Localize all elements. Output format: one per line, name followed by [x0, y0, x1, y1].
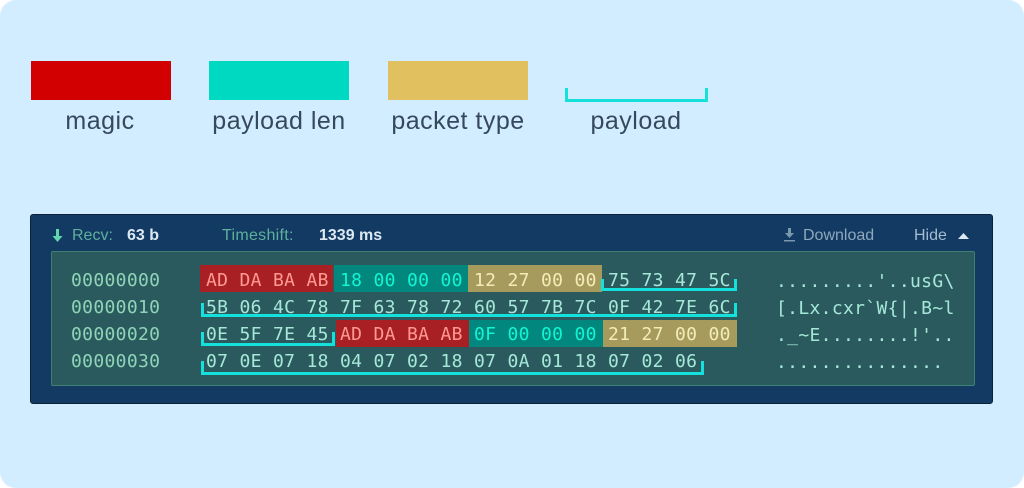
bytes: payload len: 0F 00 00 00 [474, 324, 597, 345]
button: Download: Download [803, 227, 874, 244]
offset: 00000020 [71, 324, 160, 345]
bytes: payload: 5B 06 4C 78 7F 63 78 72 60 57 7B 7C 0F 42 7E 6C [206, 297, 731, 318]
legend swatch: packet type [388, 61, 528, 100]
legend swatch: magic [31, 61, 171, 100]
highlight: payload len [469, 320, 603, 347]
bytes: payload: 07 0E 07 18 04 07 02 18 07 0A 01 18 07 02 06 [206, 351, 697, 372]
highlight: packet type [468, 265, 602, 292]
offset: 00000010 [71, 297, 160, 318]
bytes: packet type: 21 27 00 00 [608, 324, 731, 345]
ascii: ._~E........!'.. [776, 325, 955, 346]
hex row 2 [71, 320, 955, 347]
legend swatch: payload len [209, 61, 349, 100]
bytes: payload len: 18 00 00 00 [340, 270, 463, 291]
ascii: .........'..usG\ [776, 271, 955, 292]
payload bracket row 3 [201, 361, 704, 375]
label: Recv: Recv: [72, 227, 113, 244]
legend label: payload: payload [590, 107, 682, 135]
offset: 00000030 [71, 351, 160, 372]
offset: 00000000 [71, 270, 160, 291]
bytes: payload: 0E 5F 7E 45 [206, 324, 329, 345]
highlight: magic [200, 265, 333, 292]
legend label: magic: magic [65, 107, 135, 135]
icon: caret up [958, 233, 969, 239]
highlight: payload len [334, 265, 468, 292]
highlight: packet type [603, 320, 737, 347]
icon: down arrow [52, 229, 62, 242]
icon: download [784, 228, 795, 242]
ascii: ............... [776, 352, 944, 373]
highlight: magic [336, 320, 469, 347]
button: Hide: Hide [914, 227, 947, 244]
bytes: magic: AD DA BA AB [340, 324, 463, 345]
payload bracket row 2 [201, 332, 335, 346]
value: 63 b: 63 b [127, 227, 159, 244]
legend label: packet type: packet type [391, 107, 525, 135]
ascii: [.Lx.cxr`W{|.B~l [776, 298, 955, 319]
legend bracket: payload [565, 88, 708, 102]
legend label: payload len: payload len [212, 107, 346, 135]
bytes: magic: AD DA BA AB [206, 270, 329, 291]
hex row 1 [71, 297, 955, 319]
label: Timeshift: Timeshift: [222, 227, 294, 244]
value: 1339 ms: 1339 ms [319, 227, 382, 244]
payload bracket row 0 [601, 279, 737, 291]
hex row 0 [71, 265, 955, 292]
panel: hex view [51, 251, 975, 386]
legend [31, 61, 708, 135]
bytes: packet type: 12 27 00 00 [474, 270, 597, 291]
payload bracket row 1 [201, 303, 737, 317]
panel: packet dump [30, 214, 993, 404]
hex row 3 [71, 351, 944, 373]
bytes: payload: 75 73 47 5C [608, 270, 731, 291]
